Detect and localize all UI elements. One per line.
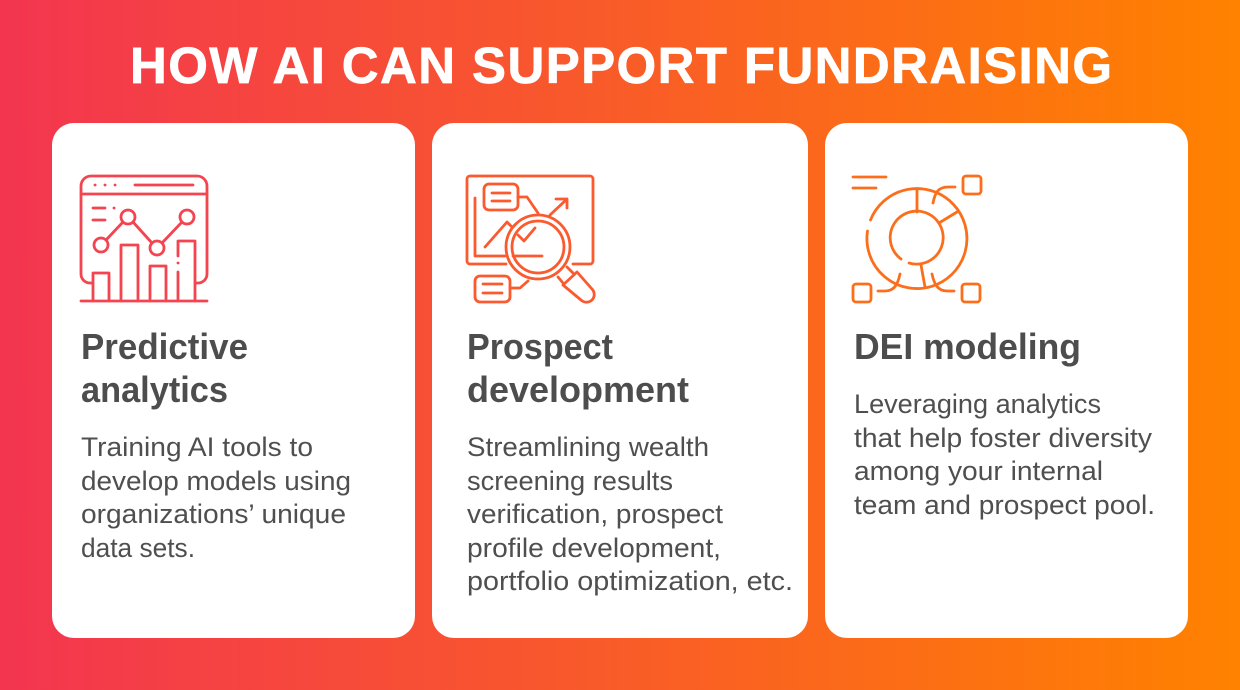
text: prospect development description: profile development, (467, 533, 721, 563)
text: DEI modeling description: among your internal (854, 456, 1103, 486)
text: prospect development description: verification, prospect (467, 499, 724, 529)
text: DEI modeling description (854, 389, 1155, 520)
text: prospect development description: screening results (467, 466, 673, 496)
heading: predictive analytics: Predictive (81, 326, 248, 367)
text: prospect development description: Streamlining wealth (467, 432, 709, 462)
heading: prospect development: development (467, 369, 689, 410)
text: predictive analytics description (81, 432, 351, 563)
panel: prospect development (432, 123, 808, 638)
text: predictive analytics description: Training AI tools to (81, 432, 313, 462)
panel: DEI modeling (825, 123, 1188, 638)
text: DEI modeling description: that help foster diversity (854, 423, 1153, 453)
icon: chart under magnifying glass (467, 176, 594, 302)
heading: predictive analytics (81, 326, 248, 410)
text: DEI modeling description: team and prospect pool. (854, 490, 1155, 520)
text: prospect development description: portfolio optimization, etc. (467, 566, 793, 596)
text: DEI modeling description: Leveraging analytics (854, 389, 1101, 419)
heading: predictive analytics: analytics (81, 369, 228, 410)
text: predictive analytics description: develop models using (81, 466, 351, 496)
text: prospect development description (467, 432, 793, 596)
panel: predictive analytics (52, 123, 415, 638)
icon: donut chart (853, 176, 981, 302)
heading: DEI modeling: DEI modeling (854, 326, 1081, 367)
text: predictive analytics description: organizations’ unique (81, 499, 346, 529)
icon: analytics dashboard (81, 176, 207, 301)
title: HOW AI CAN SUPPORT FUNDRAISING (130, 37, 1112, 94)
heading: prospect development: Prospect (467, 326, 613, 367)
text: predictive analytics description: data sets. (81, 533, 195, 563)
heading: prospect development (467, 326, 689, 410)
